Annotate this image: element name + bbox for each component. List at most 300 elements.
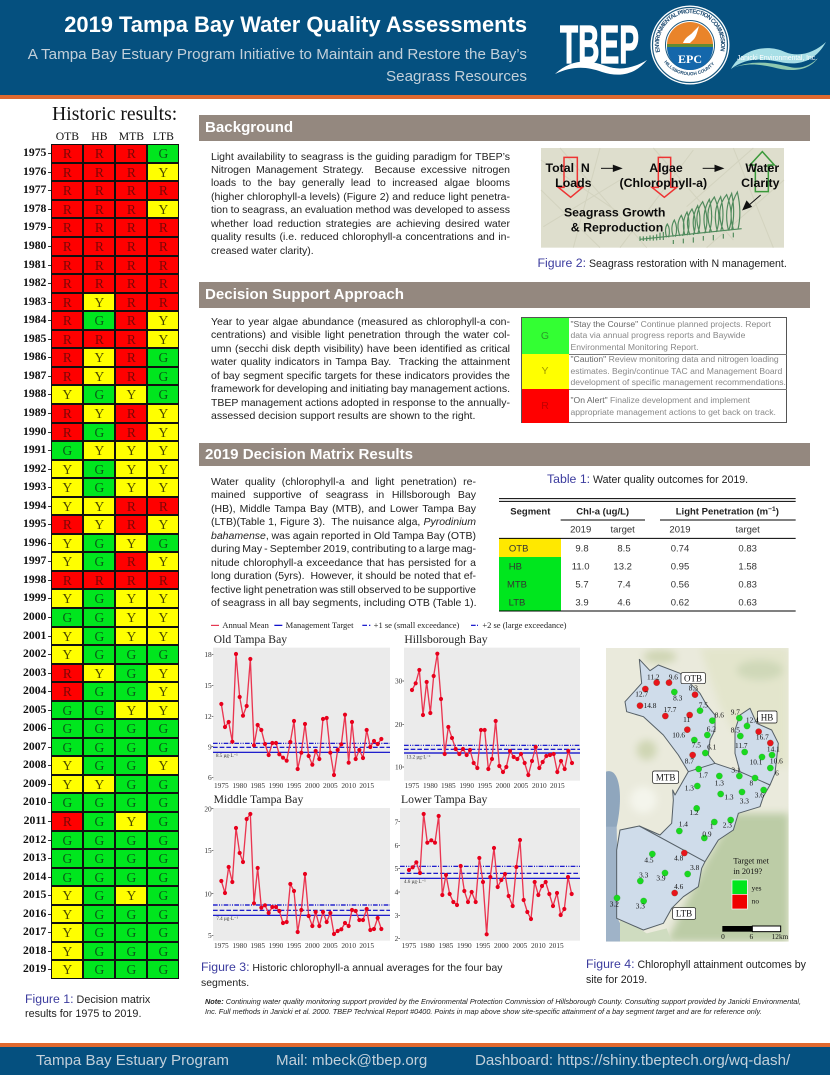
note: Inc. Full methods in Janicki et al. 2000. TBEP Technical Report #0400. Points in map above show site-specific attainment of a bay segment target and are for reference only.	[205, 1006, 762, 1016]
background paragraph: loads to the bay generally lead to increased algae blooms	[211, 177, 510, 189]
matrix column labels: MTB	[119, 130, 144, 143]
decision matrix heatmap 1975-2019: Y	[63, 907, 72, 922]
decision matrix heatmap 1975-2019: 1984	[23, 313, 46, 326]
chart: lower tampa bay: 2015	[549, 941, 564, 950]
decision matrix heatmap 1975-2019: 1997	[23, 554, 46, 567]
decision matrix heatmap 1975-2019: R	[159, 258, 168, 273]
decision matrix heatmap 1975-2019: G	[95, 870, 104, 885]
title: 2019 Tampa Bay Water Quality Assessments	[64, 12, 527, 37]
decision matrix heatmap 1975-2019: R	[63, 369, 72, 384]
table 1: water quality outcomes: MTB	[507, 580, 527, 591]
subtitle: Seagrass Resources	[386, 68, 527, 85]
decision matrix heatmap 1975-2019: R	[63, 313, 72, 328]
decision matrix heatmap 1975-2019: G	[159, 721, 168, 736]
decision matrix heatmap 1975-2019: R	[95, 573, 104, 588]
chart: hillsborough bay: Hillsborough Bay	[404, 633, 488, 646]
site values: 7.5	[699, 701, 708, 710]
chart: lower tampa bay: 1975	[402, 941, 417, 950]
decision matrix heatmap 1975-2019: G	[127, 870, 136, 885]
decision matrix heatmap 1975-2019: R	[63, 332, 72, 347]
decision matrix heatmap 1975-2019: 1981	[23, 258, 46, 271]
decision matrix heatmap 1975-2019: 2013	[23, 851, 46, 864]
decision matrix heatmap 1975-2019: Y	[127, 443, 136, 458]
decision matrix heatmap 1975-2019: R	[127, 295, 136, 310]
decision matrix heatmap 1975-2019: R	[63, 258, 72, 273]
decision matrix heatmap 1975-2019: R	[127, 424, 136, 440]
figure 2: seagrass restoration diagram	[540, 148, 784, 248]
decision matrix heatmap 1975-2019: Y	[63, 462, 72, 477]
site values: 12.7	[635, 690, 648, 699]
logo: EPC seal: HILLSBOROUGH COUNTY	[664, 60, 714, 76]
decision matrix heatmap 1975-2019: R	[63, 814, 72, 829]
decision matrix heatmap 1975-2019: R	[95, 183, 104, 198]
chart: old tampa bay: 2000	[305, 781, 320, 790]
decision matrix heatmap 1975-2019: 2008	[23, 758, 46, 771]
map legend: yes	[752, 884, 762, 893]
decision matrix heatmap 1975-2019: Y	[159, 406, 168, 421]
chart legend	[211, 620, 567, 630]
chart: middle tampa bay: 20	[204, 804, 212, 813]
table 1: water quality outcomes: 0.62	[671, 598, 689, 609]
decision matrix heatmap 1975-2019: R	[159, 239, 168, 254]
site values: 10.6	[672, 730, 685, 739]
decision matrix heatmap 1975-2019: Y	[159, 517, 168, 532]
decision matrix heatmap 1975-2019: 1999	[23, 591, 46, 604]
site values: 4.5	[644, 855, 654, 864]
site values: 11.7	[735, 741, 748, 750]
footer band	[0, 1043, 830, 1075]
red row	[522, 389, 568, 423]
decision matrix heatmap 1975-2019: Y	[159, 332, 168, 347]
decision matrix heatmap 1975-2019: Y	[127, 703, 136, 718]
decision matrix heatmap 1975-2019: R	[127, 165, 136, 180]
decision matrix heatmap 1975-2019: G	[127, 777, 136, 792]
decision matrix heatmap 1975-2019: Y	[127, 387, 136, 402]
decision matrix results paragraph: mained supportive of seagrass in Hillsborough Bay	[211, 489, 476, 501]
chart legend: Management Target	[286, 620, 354, 630]
figure 4 caption: site for 2019.	[586, 974, 647, 986]
chart: old tampa bay: 1975	[214, 781, 229, 790]
decision actions table	[520, 317, 787, 423]
decision matrix heatmap 1975-2019: Y	[159, 313, 168, 328]
decision support paragraph: of bay segment specific targets for these indicators provides the	[211, 370, 510, 382]
heading: decision support approach: Decision Support Approach	[205, 286, 404, 303]
chart: hillsborough bay: 2015	[550, 781, 565, 790]
decision matrix heatmap 1975-2019: G	[127, 795, 136, 810]
yellow row	[522, 354, 568, 389]
logo: TBEP: TBEP	[560, 15, 639, 75]
decision matrix heatmap 1975-2019: R	[127, 258, 136, 273]
decision matrix heatmap 1975-2019: Y	[63, 888, 72, 903]
subtitle	[28, 46, 527, 85]
header band	[0, 0, 830, 99]
site values: 4.8	[674, 854, 684, 863]
sites meeting target	[614, 689, 775, 904]
decision support paragraph	[211, 316, 510, 422]
decision matrix heatmap 1975-2019: Y	[159, 610, 168, 625]
decision matrix heatmap 1975-2019: Y	[159, 758, 168, 773]
figure 4 caption: Figure 4: Chlorophyll attainment outcomes by	[586, 957, 806, 971]
decision matrix heatmap 1975-2019: Y	[159, 666, 168, 681]
site values: 8.3	[689, 684, 698, 693]
table 1: water quality outcomes: 8.5	[617, 544, 631, 555]
chart: middle tampa bay: 15	[204, 846, 212, 855]
figure 1 caption: results for 1975 to 2019.	[25, 1008, 141, 1020]
decision matrix heatmap 1975-2019: G	[63, 721, 72, 736]
decision matrix heatmap 1975-2019: G	[159, 888, 168, 903]
segment labels	[653, 673, 777, 919]
chart: hillsborough bay	[395, 633, 580, 790]
chart: old tampa bay: 9	[208, 742, 212, 751]
background paragraph: Light availability to seagrass is the guiding paradigm for TBEP’s	[211, 150, 510, 162]
logo: EPC seal	[650, 6, 730, 84]
chart: old tampa bay: 1985	[250, 781, 265, 790]
decision matrix heatmap 1975-2019: 1988	[23, 387, 46, 400]
decision matrix heatmap 1975-2019: G	[95, 554, 104, 569]
diagram labels: Clarity	[741, 176, 780, 190]
decision matrix heatmap 1975-2019: Y	[159, 591, 168, 606]
chart: middle tampa bay: 5	[208, 931, 212, 940]
decision matrix heatmap 1975-2019: G	[127, 684, 136, 699]
decision support paragraph: assessed decision support results are shown to the right.	[211, 410, 475, 422]
row dividers	[568, 354, 786, 355]
site values: 3.2	[610, 900, 619, 909]
decision matrix heatmap 1975-2019: G	[95, 833, 104, 848]
decision matrix heatmap 1975-2019: 2001	[23, 629, 46, 642]
site values	[610, 672, 783, 910]
site values: 3.8	[690, 863, 700, 872]
decision matrix heatmap 1975-2019: G	[95, 313, 104, 328]
decision matrix heatmap 1975-2019: Y	[127, 610, 136, 625]
chart: hillsborough bay: 1990	[459, 781, 474, 790]
decision matrix heatmap 1975-2019: G	[127, 833, 136, 848]
yellow row: Y	[541, 365, 548, 377]
decision matrix heatmap 1975-2019: 2019	[23, 962, 46, 975]
logos	[555, 6, 826, 84]
table 1: water quality outcomes: Light Penetration (m	[676, 506, 768, 517]
decision matrix heatmap 1975-2019: Y	[159, 443, 168, 458]
decision matrix heatmap 1975-2019: Y	[95, 517, 104, 532]
chart: old tampa bay: Old Tampa Bay	[214, 633, 287, 646]
chart legend: +1 se (small exceedance)	[374, 620, 460, 630]
decision matrix heatmap 1975-2019: G	[127, 962, 136, 977]
chart: middle tampa bay: 2010	[341, 941, 356, 950]
chart: hillsborough bay: 1980	[423, 781, 438, 790]
seagrass sketch	[640, 192, 742, 244]
scale bar	[721, 926, 789, 941]
chart: middle tampa bay: Middle Tampa Bay	[214, 793, 303, 806]
decision matrix heatmap 1975-2019: 1987	[23, 369, 46, 382]
site values: 10.6	[770, 757, 783, 766]
decision matrix heatmap 1975-2019: G	[127, 925, 136, 940]
decision matrix heatmap 1975-2019: Y	[159, 629, 168, 644]
decision matrix heatmap 1975-2019: G	[63, 443, 72, 458]
table 1: water quality outcomes: target	[611, 525, 635, 536]
decision matrix heatmap 1975-2019: R	[63, 666, 72, 681]
site values: 1.2	[689, 808, 699, 817]
map legend: Target met	[733, 857, 770, 866]
site values: 9.7	[731, 707, 740, 716]
decision matrix heatmap 1975-2019: 1975	[23, 146, 46, 159]
site values: 8.3	[673, 693, 683, 702]
heading: background: Background	[205, 119, 293, 136]
decision support paragraph: framework for developing and initiating bay management actions.	[211, 383, 510, 395]
figure 3 caption: Figure 3: Historic chlorophyll-a annual averages for the four bay	[201, 960, 502, 974]
decision actions table: "Stay the Course" Continue planned projects. Report	[570, 318, 771, 328]
chart: lower tampa bay: 2	[395, 934, 399, 943]
decision matrix heatmap 1975-2019: G	[63, 795, 72, 810]
map legend: no	[752, 897, 759, 906]
chart: hillsborough bay: 2010	[532, 781, 547, 790]
decision matrix heatmap 1975-2019: G	[159, 833, 168, 848]
figure 4: site attainment map	[606, 648, 789, 942]
decision matrix heatmap 1975-2019: G	[159, 536, 168, 551]
decision matrix heatmap 1975-2019: G	[95, 387, 104, 402]
decision matrix heatmap 1975-2019: 1992	[23, 462, 46, 475]
table 1: water quality outcomes: Chl-a (ug/L)	[576, 506, 629, 517]
decision matrix heatmap 1975-2019: R	[127, 332, 136, 347]
scale bar: 6	[749, 932, 753, 941]
decision support paragraph: umn (secchi disk depth visibility) have been identified as critical	[211, 343, 510, 355]
decision matrix results paragraph: long duration (5yrs). However, it should be noted that ef-	[211, 570, 476, 582]
decision matrix heatmap 1975-2019: G	[127, 666, 136, 681]
chart: lower tampa bay: 1995	[476, 941, 491, 950]
diagram labels: Loads	[555, 176, 592, 190]
decision matrix results paragraph: Water quality (chlorophyll-a and light penetration) re-	[211, 476, 476, 488]
chart: old tampa bay: 2010	[341, 781, 356, 790]
decision matrix heatmap 1975-2019: R	[127, 554, 136, 569]
decision matrix heatmap 1975-2019: R	[159, 499, 168, 514]
scale bar: 12km	[772, 932, 789, 941]
decision matrix heatmap 1975-2019: R	[63, 424, 72, 440]
decision matrix heatmap 1975-2019: R	[63, 202, 72, 217]
decision matrix heatmap 1975-2019: Y	[95, 777, 104, 792]
decision support paragraph: water quality indicators in Tampa Bay. Tracking the attainment	[211, 356, 510, 368]
site values: 6	[775, 768, 779, 777]
table 1: water quality outcomes: 9.8	[575, 544, 589, 555]
figure 2 caption: Figure 2: Seagrass restoration with N management.	[538, 256, 787, 270]
decision matrix heatmap 1975-2019: Y	[63, 387, 72, 402]
site values: 3.3	[740, 796, 749, 805]
decision actions table: "On Alert" Finalize development and implement	[570, 395, 750, 405]
figure 3 caption: segments.	[201, 978, 249, 989]
decision matrix heatmap 1975-2019: G	[127, 851, 136, 866]
decision matrix heatmap 1975-2019: Y	[159, 462, 168, 477]
background paragraph	[211, 150, 510, 257]
table 1: water quality outcomes: 5.7	[575, 580, 589, 591]
diagram labels: (Chlorophyll-a)	[619, 176, 707, 190]
site values: 8.5	[731, 725, 740, 734]
decision matrix heatmap 1975-2019: G	[63, 833, 72, 848]
decision matrix heatmap 1975-2019: Y	[95, 350, 104, 365]
decision matrix heatmap 1975-2019: R	[127, 239, 136, 254]
decision matrix heatmap 1975-2019: 2015	[23, 888, 46, 901]
chart: middle tampa bay: 1990	[269, 941, 284, 950]
figure 1 caption: Figure 1: Decision matrix	[25, 992, 150, 1006]
decision matrix heatmap 1975-2019: Y	[127, 462, 136, 477]
segment labels: MTB	[656, 772, 675, 782]
logo: Janicki Environmental	[731, 42, 826, 70]
decision matrix heatmap 1975-2019: 1998	[23, 573, 46, 586]
decision matrix heatmap 1975-2019: G	[95, 480, 104, 495]
decision matrix heatmap 1975-2019: G	[159, 870, 168, 885]
decision matrix heatmap 1975-2019: 2012	[23, 833, 46, 846]
decision matrix heatmap 1975-2019: Y	[63, 499, 72, 514]
decision matrix heatmap 1975-2019: R	[95, 202, 104, 217]
decision matrix heatmap 1975-2019: Y	[159, 165, 168, 180]
decision matrix heatmap 1975-2019: 1982	[23, 276, 46, 289]
decision matrix heatmap 1975-2019: Y	[127, 888, 136, 903]
decision matrix heatmap 1975-2019: G	[95, 944, 104, 959]
decision matrix heatmap 1975-2019: 1996	[23, 536, 46, 549]
decision matrix heatmap 1975-2019: R	[95, 258, 104, 273]
decision matrix heatmap 1975-2019: 2014	[23, 870, 46, 883]
chart: old tampa bay: 12	[204, 712, 212, 721]
chart: lower tampa bay: 2000	[494, 941, 509, 950]
matrix column labels: HB	[91, 130, 108, 143]
decision matrix heatmap 1975-2019: R	[63, 239, 72, 254]
table 1: water quality outcomes: OTB	[509, 544, 528, 555]
decision matrix heatmap 1975-2019: G	[159, 387, 168, 402]
chart: old tampa bay: 1990	[269, 781, 284, 790]
decision matrix heatmap 1975-2019: R	[63, 573, 72, 588]
chart: hillsborough bay: 20	[395, 720, 403, 729]
decision matrix heatmap 1975-2019: R	[63, 295, 72, 310]
decision matrix results paragraph: during May - September 2019, contributing to a large mag-	[211, 543, 476, 555]
decision matrix heatmap 1975-2019: R	[95, 220, 104, 235]
decision matrix heatmap 1975-2019: 1986	[23, 350, 46, 363]
decision matrix heatmap 1975-2019: G	[127, 944, 136, 959]
chart: hillsborough bay: 1985	[441, 781, 456, 790]
figure 3 caption	[201, 960, 502, 989]
site values: 1.7	[699, 770, 708, 779]
footer: dashboard link: Dashboard: https://shiny.tbeptech.org/wq-dash/	[475, 1052, 790, 1069]
background paragraph: quality results (i.e. reduced chlorophyll-a concentrations and in-	[211, 231, 510, 243]
chart: hillsborough bay: 30	[395, 677, 403, 686]
decision matrix heatmap 1975-2019: Y	[63, 944, 72, 959]
decision matrix heatmap 1975-2019: R	[95, 165, 104, 180]
decision matrix heatmap 1975-2019: 2007	[23, 740, 46, 753]
decision matrix heatmap 1975-2019: 1977	[23, 183, 46, 196]
decision matrix heatmap 1975-2019: R	[127, 573, 136, 588]
decision matrix heatmap 1975-2019: Y	[63, 536, 72, 551]
segment labels: OTB	[684, 673, 702, 683]
black arrows	[601, 165, 761, 210]
figure 4 caption	[586, 957, 806, 986]
figure 1 caption	[25, 992, 150, 1020]
decision matrix heatmap 1975-2019: G	[159, 925, 168, 940]
table 1: water quality outcomes: 0.74	[671, 544, 689, 555]
decision matrix heatmap 1975-2019: G	[95, 925, 104, 940]
site values: 1	[710, 821, 714, 830]
decision matrix heatmap 1975-2019: Y	[63, 554, 72, 569]
chart: hillsborough bay: 1975	[405, 781, 420, 790]
decision matrix heatmap 1975-2019: Y	[95, 295, 104, 310]
decision matrix heatmap 1975-2019: R	[63, 220, 72, 235]
decision actions table: "Caution" Review monitoring data and nitrogen loading	[570, 354, 779, 364]
table 1: water quality outcomes: 1.58	[738, 562, 757, 573]
decision matrix heatmap 1975-2019: 1989	[23, 406, 46, 419]
decision matrix heatmap 1975-2019: Y	[95, 666, 104, 681]
decision matrix heatmap 1975-2019: R	[63, 517, 72, 532]
site values: 11	[683, 715, 691, 724]
decision matrix heatmap 1975-2019: 2010	[23, 795, 46, 808]
site values: 7.5	[692, 741, 701, 750]
decision matrix heatmap 1975-2019: R	[127, 369, 136, 384]
note	[205, 996, 801, 1016]
chart: middle tampa bay: 10	[204, 889, 212, 898]
decision matrix heatmap 1975-2019: G	[63, 851, 72, 866]
decision matrix heatmap 1975-2019: G	[159, 944, 168, 959]
chart: hillsborough bay: 2005	[514, 781, 529, 790]
decision matrix heatmap 1975-2019: G	[95, 684, 104, 699]
decision matrix heatmap 1975-2019: G	[159, 777, 168, 792]
decision matrix heatmap 1975-2019: R	[95, 332, 104, 347]
decision matrix heatmap 1975-2019: G	[159, 350, 168, 365]
chart: old tampa bay: 18	[204, 650, 212, 659]
table 1: water quality outcomes: 11.0	[572, 562, 590, 573]
decision actions table: estimates. Begin/continue TAC and Management Board	[570, 366, 782, 376]
chart: lower tampa bay: 2010	[531, 941, 546, 950]
decision matrix heatmap 1975-2019: Y	[63, 777, 72, 792]
decision matrix heatmap 1975-2019: R	[95, 146, 104, 161]
decision matrix heatmap 1975-2019: G	[95, 795, 104, 810]
chart: middle tampa bay: 1975	[214, 941, 229, 950]
table 1: water quality outcomes: 7.4	[617, 580, 631, 591]
decision matrix heatmap 1975-2019: 1985	[23, 332, 46, 345]
decision matrix heatmap 1975-2019: 2000	[23, 610, 46, 623]
decision matrix results paragraph	[211, 476, 477, 609]
site values: 1.3	[685, 784, 694, 793]
decision matrix heatmap 1975-2019: G	[159, 851, 168, 866]
bay segment polygons	[617, 659, 778, 930]
decision matrix heatmap 1975-2019: Y	[127, 814, 136, 829]
decision matrix heatmap 1975-2019: G	[159, 814, 168, 829]
decision matrix heatmap 1975-2019: G	[159, 369, 168, 384]
decision matrix heatmap 1975-2019: Y	[159, 202, 168, 217]
chart: lower tampa bay: 1990	[457, 941, 472, 950]
decision matrix heatmap 1975-2019: G	[159, 146, 168, 161]
decision matrix heatmap 1975-2019: R	[127, 183, 136, 198]
chart: middle tampa bay: 2005	[323, 941, 338, 950]
site values: 14.1	[767, 744, 780, 753]
diagram labels: Algae	[649, 161, 683, 175]
map base land and water	[606, 648, 789, 942]
decision matrix heatmap 1975-2019: Y	[127, 591, 136, 606]
decision matrix heatmap 1975-2019: R	[127, 313, 136, 328]
site values: 1.3	[724, 793, 734, 802]
chart: old tampa bay: 2015	[359, 781, 374, 790]
site values: 0.9	[702, 829, 712, 838]
diagram labels: Water	[745, 161, 779, 175]
decision matrix heatmap 1975-2019: R	[127, 220, 136, 235]
decision matrix heatmap 1975-2019: Y	[63, 758, 72, 773]
decision matrix heatmap 1975-2019: 2018	[23, 944, 46, 957]
decision matrix heatmap 1975-2019: G	[95, 462, 104, 477]
decision matrix heatmap 1975-2019: R	[127, 499, 136, 514]
decision matrix heatmap 1975-2019: G	[95, 629, 104, 644]
scale bar: 0	[721, 932, 725, 941]
decision matrix heatmap 1975-2019: R	[63, 183, 72, 198]
decision matrix heatmap 1975-2019: Y	[63, 591, 72, 606]
chart: hillsborough bay: 10	[395, 763, 403, 772]
decision matrix heatmap 1975-2019: G	[95, 647, 104, 662]
site values: 6.2	[707, 724, 716, 733]
chart: hillsborough bay: 2000	[496, 781, 511, 790]
decision actions table: development of specific management recommendations.	[570, 377, 786, 387]
decision actions table: data via annual progress reports and Baywide	[570, 330, 745, 340]
background paragraph: whether load reduction strategies are achieving desired water	[211, 218, 510, 230]
